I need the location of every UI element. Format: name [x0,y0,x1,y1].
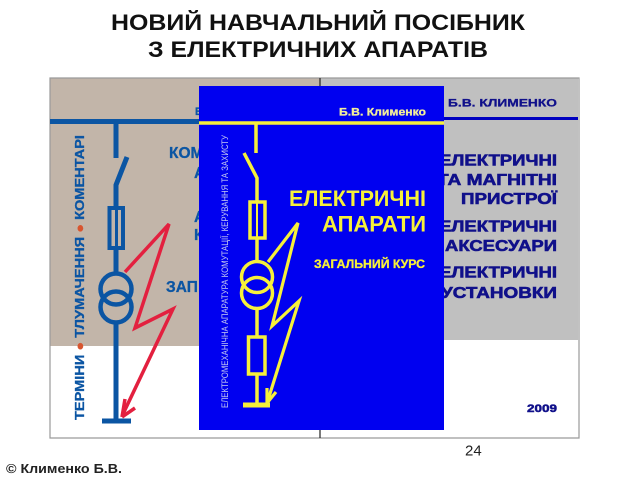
cover title: АПАРАТИ [322,212,426,236]
cover title: ЕЛЕКТРИЧНІ [289,186,426,211]
title [111,10,526,62]
panel: book spread [50,78,579,438]
cover author: Б.В. Клименко [339,106,426,118]
back book right titles: ЕЛЕКТРИЧНІ [439,264,557,282]
title: З ЕЛЕКТРИЧНИХ АПАРАТІВ [148,37,488,62]
back book right titles: ЕЛЕКТРИЧНІ [439,218,557,236]
back book left labels [166,106,205,296]
panel: back book diagram [50,121,200,421]
back book left labels: К [194,227,204,244]
back book right titles: ТА МАГНІТНІ [437,172,557,189]
cover subtitle: ЗАГАЛЬНИЙ КУРС [314,258,425,271]
back book right titles: ПРИСТРОЇ [461,191,558,208]
back book right titles [437,152,558,302]
back book right titles: ЕЛЕКТРИЧНІ [439,152,557,170]
title: НОВИЙ НАВЧАЛЬНИЙ ПОСІБНИК [111,10,526,35]
cover title [289,186,426,236]
cover diagram [199,123,444,405]
copyright: © Клименко Б.В. [6,461,122,476]
icon: red lightning bolt [122,224,173,417]
back book left labels: КОМ [169,145,203,162]
panel: blue front cover [199,86,444,430]
back book left labels: А [194,165,205,182]
vertical text: back book series: ТЕРМІНИ ● ТЛУМАЧЕННЯ ● КОМЕНТАРІ [73,135,87,420]
cover lightning bolt [267,223,299,403]
back book right header [444,98,578,120]
cover vertical subtitle: ЕЛЕКТРОМЕХАНІЧНА АПАРАТУРА КОМУТАЦІЇ, КЕРУВАННЯ ТА ЗАХИСТУ [220,134,231,408]
back book left labels: Б [195,106,203,118]
back book left labels: А [194,209,205,226]
page number: 24 [465,442,482,460]
back book left labels: ЗАП [166,279,198,296]
year: 2009 [527,403,557,415]
back book right titles: АКСЕСУАРИ [445,238,557,255]
back book right header: Б.В. КЛИМЕНКО [448,98,558,110]
back book right titles: УСТАНОВКИ [441,285,557,302]
